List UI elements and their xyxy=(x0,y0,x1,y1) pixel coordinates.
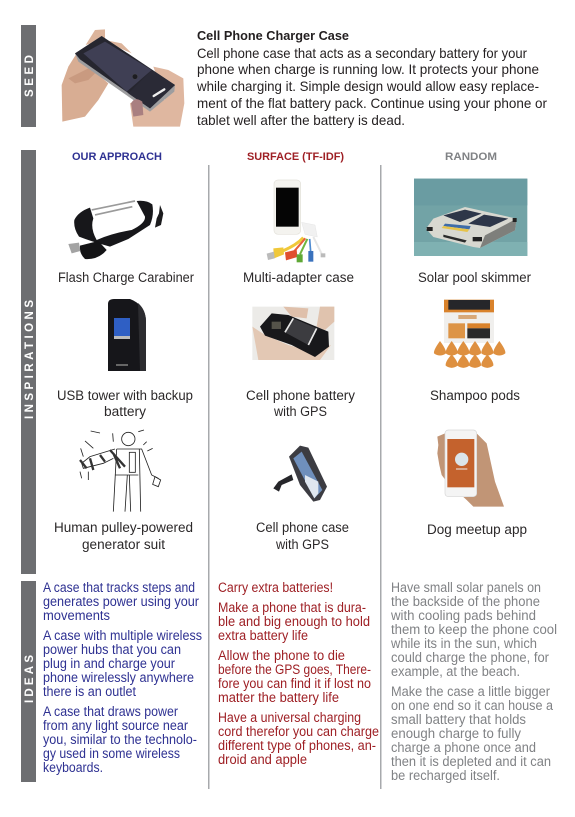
ideas: random: be recharged itself. xyxy=(391,768,500,783)
column header: random: RANDOM xyxy=(445,151,497,163)
label: multi-adapter case: Multi-adapter case xyxy=(243,270,354,285)
sidebar: ideas: IDEAS xyxy=(24,655,36,703)
sidebar: seed xyxy=(21,25,36,127)
ideas: our approach: gy used in some wireless xyxy=(43,746,180,761)
sidebar: ideas xyxy=(21,581,36,782)
label: cell phone case xyxy=(256,520,349,552)
ideas: random: Make the case a little bigger xyxy=(391,684,550,699)
label: cell phone battery: Cell phone battery xyxy=(246,388,355,403)
label: human pulley suit xyxy=(54,520,193,552)
ideas: surface: fore you can find it if lost no xyxy=(218,676,371,691)
label: cell phone battery: with GPS xyxy=(273,404,327,419)
ideas: our approach: from any light source near xyxy=(43,718,188,733)
ideas: surface: matter the battery life xyxy=(218,690,339,705)
seed description: ment of the flat battery pack. Continue using your phone or xyxy=(197,95,547,111)
label: usb tower: USB tower with backup xyxy=(57,388,193,403)
ideas: random: charge a phone once and xyxy=(391,740,536,755)
ideas: random: enough charge to fully xyxy=(391,726,521,741)
label: usb tower: battery xyxy=(104,404,146,419)
ideas: surface xyxy=(218,580,379,767)
ideas: surface: Carry extra batteries! xyxy=(218,580,333,595)
ideas: our approach: you, similar to the technolo- xyxy=(43,732,197,747)
ideas: random: on one end so it can house a xyxy=(391,698,553,713)
ideas: random: then it is depleted and it can xyxy=(391,754,551,769)
ideas: our approach: keyboards. xyxy=(43,760,103,775)
label: human pulley suit: Human pulley-powered xyxy=(54,520,193,535)
image: pulley generator suit drawing xyxy=(80,430,161,512)
sidebar: seed: SEED xyxy=(24,55,36,97)
sidebar: inspirations xyxy=(21,150,36,574)
seed description: while charging it. Simple design would allow easy replace- xyxy=(196,78,539,94)
ideas: our approach: A case that tracks steps and xyxy=(43,580,195,595)
ideas: random: them to keep the phone cool xyxy=(391,622,557,637)
image: shampoo pods xyxy=(434,300,505,368)
seed description: Cell phone case that acts as a secondary battery for your xyxy=(197,45,527,61)
ideas: random xyxy=(390,580,557,783)
ideas: surface: ble and big enough to hold xyxy=(218,614,370,629)
label: cell phone case: Cell phone case xyxy=(256,520,349,535)
image: phone case with GPS mount xyxy=(273,446,327,502)
label: cell phone case: with GPS xyxy=(275,537,329,552)
ideas: our approach: plug in and charge your xyxy=(43,656,175,671)
seed description: phone when charge is running low. It protects your phone xyxy=(197,61,539,77)
label: usb tower xyxy=(57,388,193,419)
image: carabiner xyxy=(68,201,163,259)
ideas: surface: extra battery life xyxy=(218,628,308,643)
image: hand holding dog meetup app xyxy=(437,430,504,507)
ideas: random: the backside of the phone xyxy=(391,594,540,609)
ideas: random: could charge the phone, for xyxy=(391,650,549,665)
ideas: our approach: power hubs that you can xyxy=(43,642,181,657)
label: cell phone battery xyxy=(246,388,355,419)
ideas: our approach: there is an outlet xyxy=(43,684,136,699)
ideas: surface: Make a phone that is dura- xyxy=(218,600,366,615)
ideas: random: small battery that holds xyxy=(391,712,526,727)
ideas: random: example, at the beach. xyxy=(391,664,520,679)
seed description: tablet well after the battery is dead. xyxy=(197,112,405,128)
seed description xyxy=(196,45,547,128)
ideas: our approach: generates power using your xyxy=(43,594,199,609)
ideas: surface: Allow the phone to die xyxy=(218,648,345,663)
ideas: surface: Have a universal charging xyxy=(218,710,361,725)
label: shampoo pods: Shampoo pods xyxy=(430,388,520,403)
ideas: our approach xyxy=(43,580,202,775)
ideas: surface: different type of phones, an- xyxy=(218,738,376,753)
ideas: our approach: A case with multiple wireless xyxy=(43,628,202,643)
label: solar pool skimmer: Solar pool skimmer xyxy=(418,270,531,285)
image: phone with multi-adapter cables xyxy=(267,180,325,262)
ideas: surface: cord therefor you can charge xyxy=(218,724,379,739)
column header: our approach: OUR APPROACH xyxy=(72,151,162,163)
label: human pulley suit: generator suit xyxy=(82,537,165,552)
photo: hands holding phone in charger case xyxy=(62,29,184,127)
ideas: our approach: A case that draws power xyxy=(43,704,178,719)
image: phone battery photo xyxy=(252,307,334,360)
image: USB tower xyxy=(108,299,146,371)
ideas: our approach: phone wirelessly anywhere xyxy=(43,670,194,685)
sidebar: inspirations: INSPIRATIONS xyxy=(24,300,36,419)
ideas: random: Have small solar panels on xyxy=(391,580,541,595)
ideas: surface: before the GPS goes, There- xyxy=(218,662,371,677)
ideas: random: while its in the sun, which xyxy=(390,636,537,651)
seed title: Cell Phone Charger Case xyxy=(197,28,349,43)
label: flash charge carabiner: Flash Charge Carabiner xyxy=(58,270,194,285)
ideas: random: with cooling pads behind xyxy=(390,608,536,623)
label: dog meetup app: Dog meetup app xyxy=(427,522,527,537)
image: solar pool skimmer xyxy=(414,179,527,256)
ideas: our approach: movements xyxy=(43,608,110,623)
column header: surface: SURFACE (TF-IDF) xyxy=(247,151,344,163)
ideas: surface: droid and apple xyxy=(218,752,307,767)
